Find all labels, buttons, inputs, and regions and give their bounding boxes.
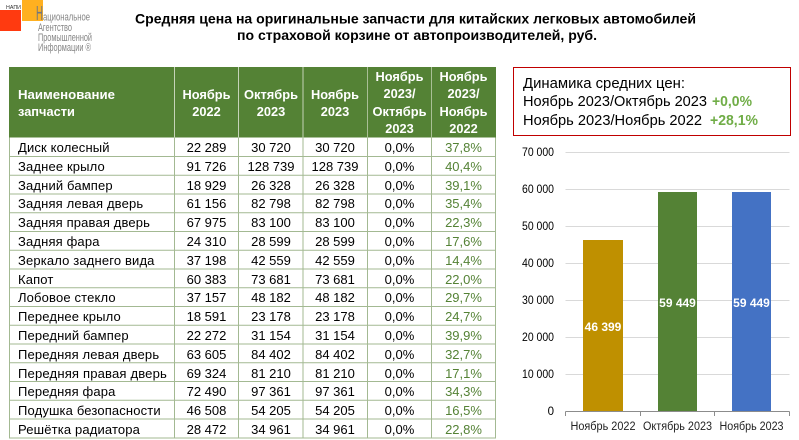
table rows: 0,0% bbox=[385, 215, 415, 230]
bar: Ноябрь 2023: 59 449 bbox=[733, 296, 770, 310]
table header: Ноябрь bbox=[440, 104, 488, 119]
table rows: 61 156 bbox=[187, 196, 226, 211]
table rows: 28 599 bbox=[251, 234, 291, 249]
table header: 2023/ bbox=[447, 86, 480, 101]
table rows: 37 157 bbox=[187, 290, 226, 305]
x axis labels: Ноябрь 2023 bbox=[720, 421, 784, 433]
y axis labels: 20 000 bbox=[522, 332, 554, 344]
logo: НАПИ: Информации ® bbox=[38, 42, 91, 54]
logo: НАПИ: Н bbox=[36, 3, 43, 25]
table rows: 91 726 bbox=[187, 159, 226, 174]
table rows: 48 182 bbox=[251, 290, 291, 305]
table rows: Лобовое стекло bbox=[18, 290, 116, 305]
table rows: 83 100 bbox=[251, 215, 291, 230]
table rows: 34 961 bbox=[251, 422, 291, 437]
table rows: 17,1% bbox=[445, 366, 482, 381]
table rows: 48 182 bbox=[315, 290, 355, 305]
table header: 2022 bbox=[449, 121, 478, 136]
table rows: Переднее крыло bbox=[18, 309, 121, 324]
table rows: 37 198 bbox=[187, 253, 226, 268]
table rows: 73 681 bbox=[315, 272, 355, 287]
table rows: 72 490 bbox=[187, 384, 226, 399]
table rows: 30 720 bbox=[315, 140, 355, 155]
table rows: 82 798 bbox=[315, 196, 355, 211]
table rows: 17,6% bbox=[445, 234, 482, 249]
table rows: 81 210 bbox=[315, 366, 355, 381]
table rows: 67 975 bbox=[187, 215, 226, 230]
table rows: 32,7% bbox=[445, 347, 482, 362]
table rows: 37,8% bbox=[445, 140, 482, 155]
table rows: 30 720 bbox=[251, 140, 291, 155]
table rows: Подушка безопасности bbox=[18, 403, 161, 418]
y axis labels: 30 000 bbox=[522, 295, 554, 307]
table rows bbox=[18, 140, 482, 437]
table rows: 54 205 bbox=[251, 403, 291, 418]
table rows: 42 559 bbox=[315, 253, 355, 268]
table rows: 0,0% bbox=[385, 309, 415, 324]
y axis labels: 70 000 bbox=[522, 147, 554, 159]
table rows: 0,0% bbox=[385, 234, 415, 249]
table rows: 83 100 bbox=[315, 215, 355, 230]
table rows: 22 289 bbox=[187, 140, 226, 155]
table rows: 60 383 bbox=[187, 272, 226, 287]
callout: price dynamics: Ноябрь 2023/Октябрь 2023 bbox=[523, 94, 707, 110]
table rows: Задняя левая дверь bbox=[18, 196, 143, 211]
table rows: 128 739 bbox=[312, 159, 358, 174]
table header: Октябрь bbox=[372, 104, 427, 119]
table rows: 40,4% bbox=[445, 159, 482, 174]
table grid bbox=[9, 138, 496, 438]
table rows: 35,4% bbox=[445, 196, 482, 211]
bar: Октябрь 2023: 59 449 bbox=[659, 296, 696, 310]
y axis labels: 10 000 bbox=[522, 369, 554, 381]
callout: price dynamics: +0,0% bbox=[712, 94, 752, 110]
table rows: 46 508 bbox=[187, 403, 226, 418]
table rows: Капот bbox=[18, 272, 54, 287]
table header: Ноябрь bbox=[376, 69, 424, 84]
table rows: 82 798 bbox=[251, 196, 291, 211]
table rows: 0,0% bbox=[385, 196, 415, 211]
logo: НАПИ: НАПИ bbox=[6, 5, 21, 11]
table rows: 16,5% bbox=[445, 403, 482, 418]
table header: Ноябрь bbox=[311, 87, 359, 102]
y axis labels bbox=[522, 147, 554, 418]
table rows: 0,0% bbox=[385, 272, 415, 287]
y axis labels: 60 000 bbox=[522, 184, 554, 196]
table header bbox=[9, 67, 496, 138]
table rows: 22,8% bbox=[445, 422, 482, 437]
table header: 2023 bbox=[321, 104, 349, 119]
table rows: Передний бампер bbox=[18, 328, 129, 343]
table rows: 69 324 bbox=[187, 366, 226, 381]
table header: Ноябрь bbox=[440, 69, 488, 84]
table rows: 18 591 bbox=[187, 309, 226, 324]
table rows: 34,3% bbox=[445, 384, 482, 399]
table rows: Передняя левая дверь bbox=[18, 347, 159, 362]
table rows: 39,9% bbox=[445, 328, 482, 343]
table rows: Передняя правая дверь bbox=[18, 366, 167, 381]
table rows: 97 361 bbox=[251, 384, 291, 399]
table rows: 54 205 bbox=[315, 403, 355, 418]
y axis gridlines bbox=[566, 152, 790, 374]
table rows: 28 472 bbox=[187, 422, 226, 437]
table rows: 63 605 bbox=[187, 347, 226, 362]
x axis labels: Октябрь 2023 bbox=[643, 421, 712, 433]
table rows: 128 739 bbox=[248, 159, 294, 174]
table rows: 0,0% bbox=[385, 384, 415, 399]
table rows: 39,1% bbox=[445, 178, 482, 193]
table rows: 81 210 bbox=[251, 366, 291, 381]
table rows: 0,0% bbox=[385, 347, 415, 362]
table rows: 18 929 bbox=[187, 178, 226, 193]
table rows: 24,7% bbox=[445, 309, 482, 324]
table rows: 0,0% bbox=[385, 253, 415, 268]
table rows: 14,4% bbox=[445, 253, 482, 268]
title bbox=[135, 10, 696, 43]
y axis labels: 40 000 bbox=[522, 258, 554, 270]
table rows: 84 402 bbox=[251, 347, 291, 362]
table rows: 26 328 bbox=[315, 178, 355, 193]
table header: запчасти bbox=[18, 104, 75, 119]
callout: price dynamics: +28,1% bbox=[710, 113, 758, 129]
table rows: 26 328 bbox=[251, 178, 291, 193]
callout: price dynamics bbox=[513, 67, 791, 136]
table rows: Заднее крыло bbox=[18, 159, 105, 174]
table header: Ноябрь bbox=[183, 87, 231, 102]
y axis labels: 0 bbox=[548, 406, 554, 418]
table rows: 34 961 bbox=[315, 422, 355, 437]
table rows: 0,0% bbox=[385, 290, 415, 305]
table rows: 97 361 bbox=[315, 384, 355, 399]
logo: НАПИ bbox=[0, 0, 92, 54]
x axis labels: Ноябрь 2022 bbox=[570, 421, 636, 433]
callout: price dynamics: Динамика средних цен: bbox=[523, 76, 685, 92]
table rows: 23 178 bbox=[251, 309, 291, 324]
table header: 2023/ bbox=[383, 86, 416, 101]
bar: Ноябрь 2023 bbox=[732, 192, 771, 412]
table rows: 22,3% bbox=[445, 215, 482, 230]
table header: 2022 bbox=[192, 104, 221, 119]
bar: Октябрь 2023 bbox=[658, 192, 697, 412]
bar chart bbox=[522, 147, 790, 433]
bar: Ноябрь 2022: 46 399 bbox=[585, 320, 622, 334]
table rows: 31 154 bbox=[251, 328, 291, 343]
table rows: Передняя фара bbox=[18, 384, 116, 399]
table header: 2023 bbox=[385, 121, 414, 136]
table rows: Диск колесный bbox=[18, 140, 110, 155]
table rows: 31 154 bbox=[315, 328, 355, 343]
table rows: 22,0% bbox=[445, 272, 482, 287]
table rows: 24 310 bbox=[187, 234, 226, 249]
table rows: Зеркало заднего вида bbox=[18, 253, 155, 268]
callout: price dynamics: Ноябрь 2023/Ноябрь 2022 bbox=[523, 113, 702, 129]
table rows: 0,0% bbox=[385, 366, 415, 381]
table rows: 0,0% bbox=[385, 422, 415, 437]
title: Средняя цена на оригинальные запчасти для китайских легковых автомобилей bbox=[135, 10, 696, 26]
table rows: 28 599 bbox=[315, 234, 355, 249]
table rows: 0,0% bbox=[385, 178, 415, 193]
table rows: 29,7% bbox=[445, 290, 482, 305]
logo: НАПИ: ациональное bbox=[43, 12, 90, 24]
table: prices by spare part bbox=[9, 67, 496, 438]
table rows: Задний бампер bbox=[18, 178, 113, 193]
table rows: Задняя фара bbox=[18, 234, 100, 249]
bar: Ноябрь 2022 bbox=[583, 240, 623, 412]
table rows: Задняя правая дверь bbox=[18, 215, 150, 230]
table rows: 0,0% bbox=[385, 403, 415, 418]
table rows: 73 681 bbox=[251, 272, 291, 287]
table rows: 0,0% bbox=[385, 159, 415, 174]
table rows: Решётка радиатора bbox=[18, 422, 141, 437]
table header: Октябрь bbox=[244, 87, 298, 102]
logo: НАПИ: Агентство bbox=[38, 22, 72, 34]
table rows: 84 402 bbox=[315, 347, 355, 362]
table rows: 0,0% bbox=[385, 328, 415, 343]
x axis labels bbox=[570, 421, 784, 433]
table header: Наименование bbox=[18, 87, 115, 102]
table rows: 23 178 bbox=[315, 309, 355, 324]
table rows: 22 272 bbox=[187, 328, 226, 343]
table rows: 0,0% bbox=[385, 140, 415, 155]
title: по страховой корзине от автопроизводителей, руб. bbox=[237, 27, 597, 43]
y axis labels: 50 000 bbox=[522, 221, 554, 233]
x axis bbox=[566, 412, 790, 416]
logo: НАПИ: Промышленной bbox=[38, 32, 92, 44]
table rows: 42 559 bbox=[251, 253, 291, 268]
table header: 2023 bbox=[257, 104, 285, 119]
